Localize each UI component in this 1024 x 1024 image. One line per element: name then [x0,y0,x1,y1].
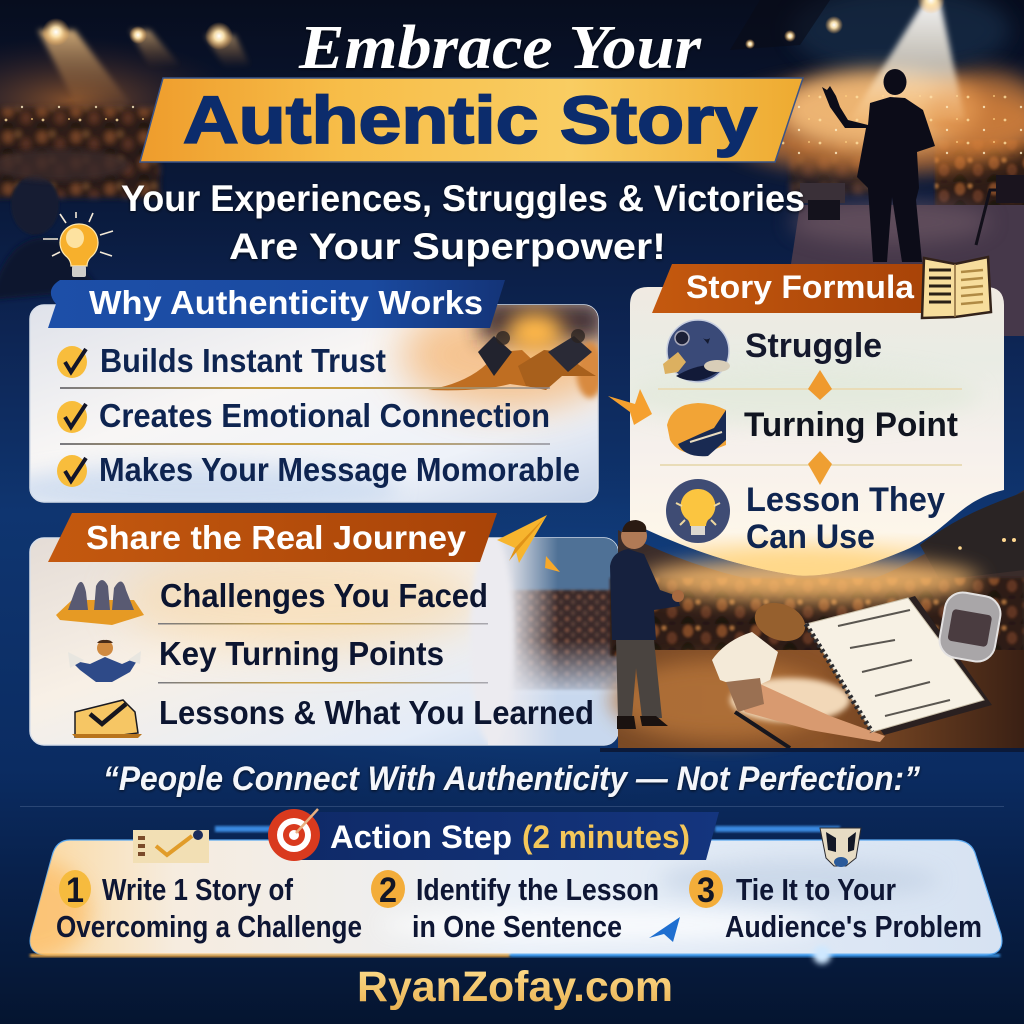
icon: trophy shield [820,828,861,867]
banner text: Authentic Story [183,83,757,158]
list row: lessons and what you learned [72,694,594,738]
icon: light bulb with rays [43,212,113,277]
list row: lessons and what you learned: Lessons & What You Learned [159,694,594,731]
heading banner: action step: (2 minutes) [522,819,690,855]
list row: key turning points: Key Turning Points [159,635,444,672]
list row: challenges you faced: Challenges You Faced [160,577,488,614]
panel: action step [0,809,1002,964]
icon: small blue paper plane [649,917,680,942]
step 2: in One Sentence [412,909,622,944]
heading banner: Story Formula [652,264,930,313]
website footer: RyanZofay.com [357,963,673,1011]
quote: “People Connect With Authenticity — Not Perfection:” [103,760,920,798]
heading banner: Why Authenticity Works [48,280,505,328]
arrow: orange pointer to turning point [608,389,652,425]
flow step: struggle: Struggle [745,327,882,365]
step 2: Identify the Lesson [416,872,659,907]
title banner: Authentic Story [140,78,803,162]
list row: key turning points [68,635,444,682]
panel: why authenticity works [29,280,599,503]
title line: Embrace Your: Embrace Your [298,14,702,82]
list row: creates emotional connection: Creates Emotional Connection [99,397,550,434]
step divider with diamond [658,370,962,400]
figure: woman leaning over pillow [712,596,885,742]
icon: paper plane [497,515,560,572]
icon: open book [922,257,991,318]
flow step: turning point: Turning Point [744,406,958,444]
step 1: 1 [66,871,84,910]
icon: open book with checkmark [72,700,142,738]
scene: audience and stage at lower right [610,490,1024,750]
icon: turning point badge [667,403,726,456]
panel: story formula [620,257,1004,601]
step 3 [689,870,982,944]
icon: person with raised arms [68,640,141,682]
heading banner: Story Formula: Story Formula [686,269,914,305]
panel: share the real journey [30,513,618,745]
illustration: spiral notebook [735,596,992,748]
heading banner: Why Authenticity Works: Why Authenticity Works [89,284,483,321]
icon: handshake [428,329,596,390]
step 2: 2 [379,871,397,910]
heading banner: Share the Real Journey: Share the Real Journey [86,519,467,556]
icon: lightbulb badge [666,479,730,543]
icon: checklist card [133,830,209,863]
list row: builds instant trust: Builds Instant Trust [100,342,386,379]
subtitle: Are Your Superpower! [229,226,666,267]
step 3: Audience's Problem [725,909,982,944]
icon: group of people [56,580,144,625]
illustration: microphone device [937,590,1003,664]
step 1 [56,870,362,944]
figure: presenter standing [610,520,684,729]
flow step: lesson they can use [666,479,945,556]
step 3: Tie It to Your [736,872,896,907]
list row: makes your message memorable: Makes Your Message Momorable [99,451,580,488]
heading banner: action step: Action Step [330,819,512,855]
step 1: Overcoming a Challenge [56,909,362,944]
step 1: Write 1 Story of [102,872,294,907]
flow step: turning point [667,403,958,456]
flow step: lesson they can use: Lesson They [746,481,945,519]
subtitle [121,178,805,267]
heading banner: action step [268,809,719,861]
speaker silhouette on stage [822,69,935,262]
list row: challenges you faced [56,577,488,625]
heading banner: Share the Real Journey [48,513,497,562]
flow step: lesson they can use: Can Use [746,518,875,556]
step 2 [371,870,659,944]
flow step: struggle [663,320,882,382]
icon: struggle badge [663,320,730,382]
icon: target with arrow [268,809,320,861]
step 3: 3 [697,871,715,910]
subtitle: Your Experiences, Struggles & Victories [121,178,805,219]
step divider with arrow drop [660,451,962,485]
